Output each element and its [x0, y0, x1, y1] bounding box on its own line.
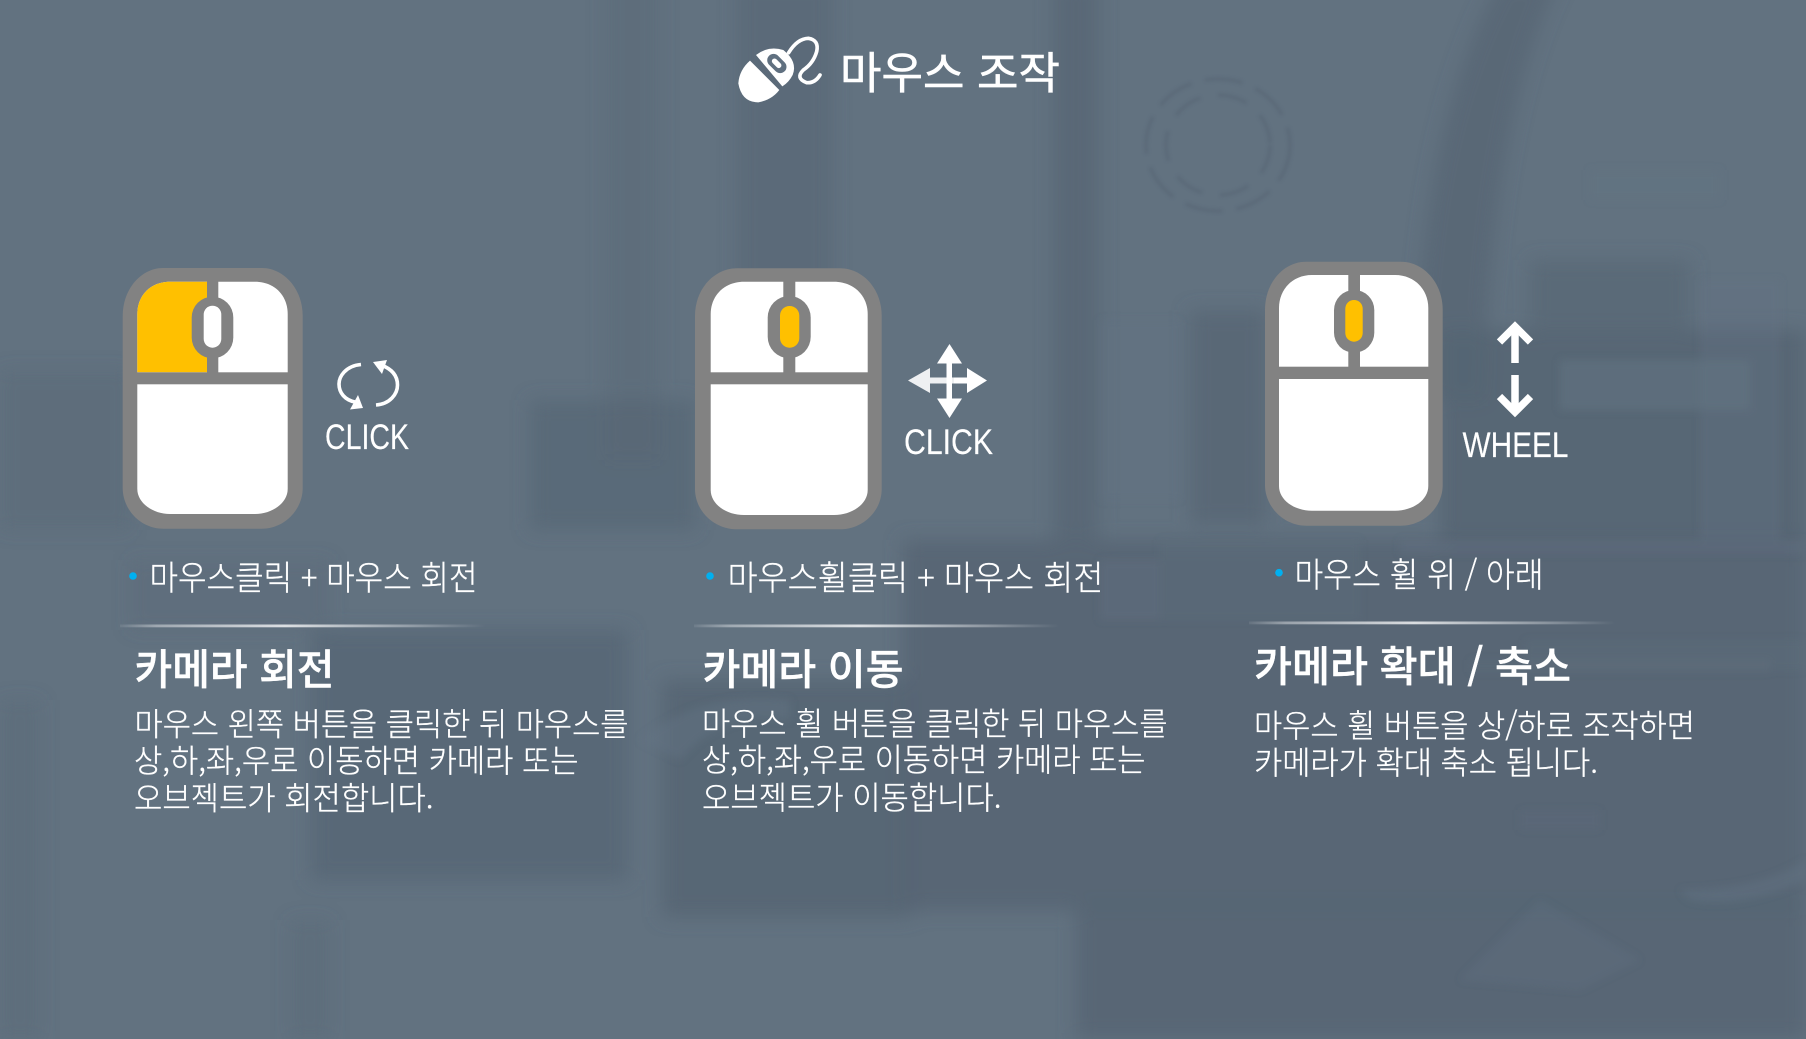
- heading: 카메라 확대 / 축소: [1254, 634, 1571, 694]
- label: WHEEL: WHEEL: [1462, 426, 1568, 465]
- label: CLICK: CLICK: [904, 423, 993, 462]
- description: 카메라가 확대 축소 됩니다.: [1254, 738, 1598, 784]
- description: 상,하,좌,우로 이동하면 카메라 또는: [134, 736, 578, 782]
- description: [134, 700, 628, 820]
- description: 오브젝트가 이동합니다.: [702, 773, 1002, 819]
- action label: 마우스 휠 위 / 아래: [1294, 548, 1544, 597]
- background: faint round gauge: [1146, 79, 1290, 211]
- icon: rotate arrows: [339, 360, 398, 410]
- panel: camera zoom: [1249, 262, 1695, 784]
- title: mouse control: [738, 38, 1060, 102]
- bullet: [706, 572, 714, 580]
- description: 오브젝트가 회전합니다.: [134, 774, 434, 820]
- icon: mouse, wheel highlighted: [1265, 262, 1443, 526]
- icon: four-way move arrows: [908, 344, 987, 418]
- panel: camera pan: [694, 268, 1168, 819]
- bullet: [129, 572, 137, 580]
- icon: mouse, wheel highlighted: [695, 268, 882, 529]
- heading: 카메라 회전: [134, 636, 334, 698]
- icon: computer mouse with cord: [738, 38, 820, 102]
- panel: camera rotate: [120, 268, 628, 820]
- heading: 카메라 이동: [702, 636, 904, 698]
- description: 마우스 휠 버튼을 클릭한 뒤 마우스를: [702, 699, 1168, 745]
- action label: 마우스휠클릭 + 마우스 회전: [728, 551, 1104, 600]
- label: CLICK: CLICK: [325, 418, 409, 457]
- description: [702, 699, 1168, 819]
- title text: 마우스 조작: [840, 38, 1060, 102]
- description: [1254, 701, 1695, 784]
- icon: up and down arrows: [1500, 326, 1530, 412]
- description: 마우스 휠 버튼을 상/하로 조작하면: [1254, 701, 1695, 747]
- bullet: [1275, 569, 1283, 576]
- description: 상,하,좌,우로 이동하면 카메라 또는: [702, 735, 1146, 781]
- description: 마우스 왼쪽 버튼을 클릭한 뒤 마우스를: [134, 700, 628, 746]
- action label: 마우스클릭 + 마우스 회전: [150, 551, 478, 600]
- icon: mouse, left button highlighted: [123, 268, 303, 529]
